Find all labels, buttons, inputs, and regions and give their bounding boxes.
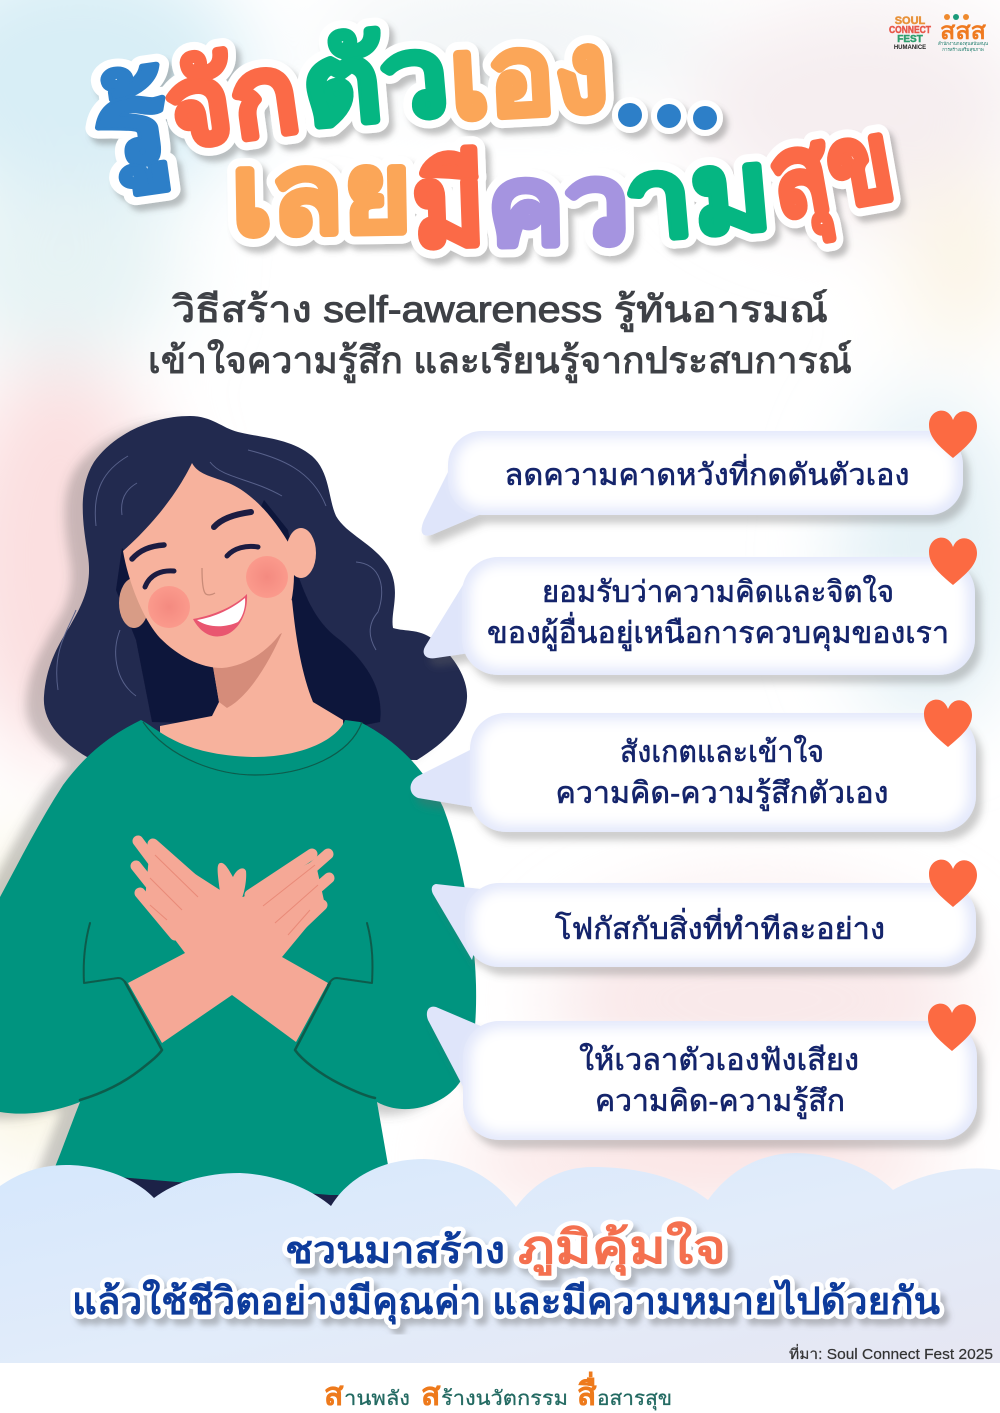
logo: สสส (938, 14, 988, 53)
footer band (0, 1363, 1000, 1413)
footer slogan: ร้างนวัตกรรม (441, 1388, 568, 1410)
collar line (143, 722, 362, 775)
speech bubble 2 (424, 538, 977, 675)
ear back (119, 578, 149, 628)
closing line 1: ภูมิคุ้มใจ (518, 1220, 726, 1276)
footer slogan: ส (421, 1376, 441, 1412)
source: ที่มา: Soul Connect Fest 2025 (789, 1344, 993, 1363)
bubble 2 text (487, 575, 949, 652)
speech bubble 4 (432, 860, 977, 967)
logo: สสส: สำนักงานกองทุนสนับสนุน (938, 40, 988, 47)
title shadow and outline: จัก (158, 30, 306, 172)
title word: มี: มี (410, 143, 487, 270)
title word: ตัว: ตัว (297, 13, 454, 150)
heart 2 (929, 538, 977, 585)
title shadow and outline (86, 9, 904, 270)
footer slogan: ส (324, 1376, 344, 1412)
heart 5 (928, 1004, 976, 1051)
footer slogan: สื่ (577, 1371, 597, 1412)
title word: เลย: เลย (230, 130, 412, 258)
bubble 4 text: โฟกัสกับสิ่งที่ทำทีละอย่าง (555, 908, 885, 946)
inner hair shadow (116, 500, 381, 730)
bubble 3 text (556, 735, 888, 811)
face (123, 463, 294, 668)
title shadow and outline: ตัว (297, 13, 454, 150)
bubble 5 text (579, 1043, 859, 1119)
closing line 1 (285, 1220, 726, 1276)
nose (202, 568, 215, 595)
title word: จัก: จัก (158, 30, 306, 172)
heart 4 (929, 860, 977, 907)
main title (86, 9, 904, 270)
logo: Soul Connect Fest: HUMANICE (894, 45, 926, 51)
hair strands (57, 450, 382, 696)
subtitle (148, 289, 852, 383)
dark waistband (120, 1165, 345, 1215)
cheeks (246, 556, 288, 598)
footer slogan (324, 1371, 672, 1412)
heart 3 (924, 700, 972, 747)
title shadow and outline: าม (619, 127, 776, 264)
title word: สุข: สุข (760, 97, 904, 250)
bubble 1 text: ลดความคาดหวังที่กดดันตัวเอง (504, 454, 910, 492)
hair (44, 416, 467, 760)
footer slogan: อสารสุข (597, 1388, 672, 1411)
title shadow and outline: เลย (230, 130, 412, 258)
speech bubble 5 (427, 1004, 977, 1140)
logo: สสส: การสร้างเสริมสุขภาพ (942, 47, 984, 53)
ear front (286, 528, 316, 578)
title shadow and outline: คว (486, 142, 630, 269)
closing line 2: แล้วใช้ชีวิตอย่างมีคุณค่า และมีความหมายไปด้วยกัน (72, 1279, 940, 1325)
bubble 2 text: ของผู้อื่นอยู่เหนือการควบคุมของเรา (487, 612, 949, 652)
cloud footer panel (0, 1153, 1000, 1363)
speech bubble 3 (410, 700, 976, 832)
title word: คว: คว (486, 142, 630, 269)
title shadow and outline: สุข (760, 97, 904, 250)
footer slogan: านพลัง (344, 1388, 410, 1410)
logos (889, 14, 988, 53)
smile (193, 594, 247, 636)
bubble 5 text: ความคิด-ความรู้สึก (595, 1085, 845, 1119)
title shadow and outline: รู้ (86, 58, 176, 199)
heart 1 (929, 411, 977, 458)
logo: Soul Connect Fest (889, 15, 931, 51)
subtitle: วิธีสร้าง self-awareness รู้ทันอารมณ์ (172, 289, 828, 332)
arms and hands (128, 841, 329, 1043)
logo: Soul Connect Fest: SOUL (895, 15, 926, 27)
sleeve cuffs (80, 923, 375, 1100)
title word: รู้: รู้ (86, 58, 176, 199)
woman illustration (0, 416, 476, 1215)
title word: าม: าม (619, 127, 776, 264)
bubble 3 text: ความคิด-ความรู้สึกตัวเอง (556, 777, 888, 811)
neck shadow (213, 633, 282, 708)
bubble 3 text: สังเกตและเข้าใจ (620, 735, 824, 769)
title word: เอง: เอง (447, 9, 611, 142)
logo: Soul Connect Fest: CONNECT (889, 25, 931, 36)
shirt (0, 720, 476, 1195)
speech bubble 1 (422, 411, 977, 536)
neck (160, 600, 345, 772)
bubble 2 text: ยอมรับว่าความคิดและจิตใจ (542, 575, 894, 609)
eyebrows and eyes (132, 512, 258, 587)
title shadow and outline: เอง (447, 9, 611, 142)
logo: Soul Connect Fest: FEST (897, 34, 923, 45)
logo: สสส: สสส (940, 18, 986, 45)
closing line 1: ชวนมาสร้าง (285, 1230, 505, 1272)
subtitle: เข้าใจความรู้สึก และเรียนรู้จากประสบการณ์ (148, 339, 852, 383)
title dots (618, 103, 717, 130)
closing message (72, 1220, 940, 1325)
bubble 5 text: ให้เวลาตัวเองฟังเสียง (579, 1043, 859, 1077)
title shadow and outline: มี (410, 143, 487, 270)
